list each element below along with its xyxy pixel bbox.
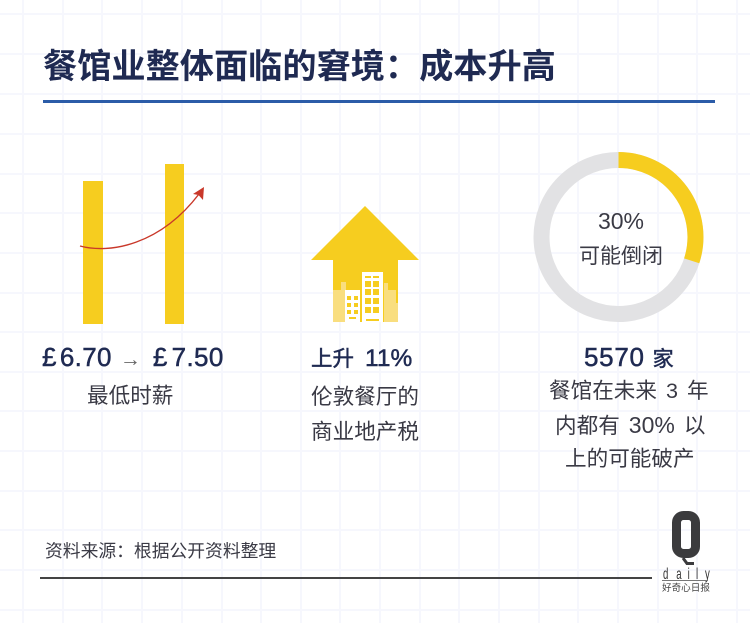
logo mark and wordmark [662,511,710,583]
caption line 3: 上的可能破产 [565,446,695,471]
footer rule [40,577,652,578]
tax caption [311,384,419,444]
donut label: 可能倒闭 [579,245,663,268]
logo mark and wordmark: daily [663,564,710,583]
risk figure: 5570 家 [584,342,674,372]
panel: property tax [311,206,419,444]
caption line 1: 餐馆在未来 3 年 [549,378,709,403]
tax figure: 上升 11% [311,345,412,372]
logo: Q daily [662,511,710,594]
bar chart: wage rise [80,164,204,324]
source note: 资料来源：根据公开资料整理 [45,541,276,561]
title underline [43,100,715,103]
caption line 2: 内都有 30% 以 [555,412,705,438]
wage figures: £6.70 → £7.50 [42,342,224,372]
panel: minimum wage [42,164,224,408]
donut label [579,208,663,268]
risk caption [549,378,709,471]
panel: closure risk [534,152,709,471]
wage caption: 最低时薪 [87,383,173,408]
donut chart: 30% [534,152,704,322]
title: 餐馆业整体面临的窘境：成本升高 [43,48,556,86]
tax caption: 商业地产税 [311,419,419,444]
icon: up arrow with buildings [311,206,419,322]
donut label: 30% [598,208,644,234]
tax caption: 伦敦餐厅的 [311,384,419,409]
logo tagline: 好奇心日报 [662,583,710,594]
